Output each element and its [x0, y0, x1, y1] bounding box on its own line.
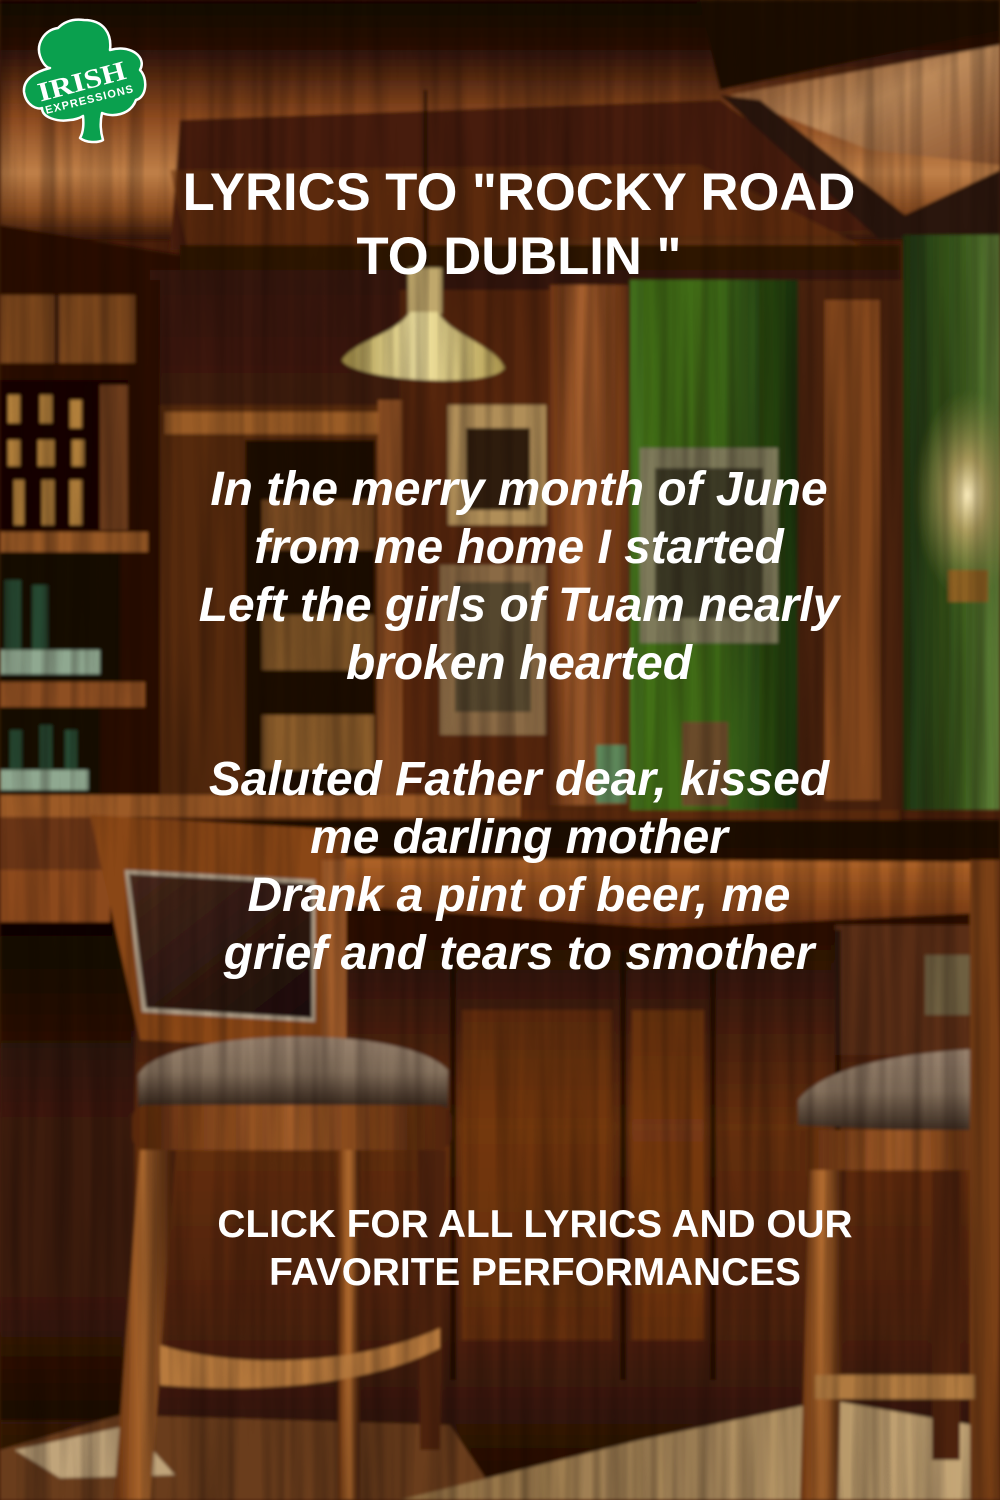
- lyrics verse: broken hearted: [346, 637, 692, 690]
- lyrics verse: Saluted Father dear, kissed: [209, 753, 829, 806]
- logo text: EXPRESSIONS: [44, 83, 134, 117]
- ceiling: [0, 0, 1000, 240]
- title: [183, 163, 855, 286]
- logo: shamrock badge: [22, 18, 146, 144]
- call to action: CLICK FOR ALL LYRICS AND OUR: [217, 1203, 853, 1246]
- logo text: IRISH: [34, 55, 129, 107]
- right stool: [798, 860, 1000, 1500]
- title: TO DUBLIN ": [357, 227, 681, 286]
- right sconce: [913, 390, 1000, 600]
- lyrics verse: grief and tears to smother: [224, 927, 814, 980]
- green wall panels: [630, 280, 798, 810]
- floor: [0, 1415, 500, 1500]
- framed pictures: [448, 405, 546, 525]
- hanging lamp: [424, 90, 427, 270]
- lyrics verse: from me home I started: [254, 521, 784, 574]
- lyrics verse: Left the girls of Tuam nearly: [199, 579, 839, 632]
- back wall: [150, 270, 900, 830]
- left stool: [90, 815, 452, 1500]
- title: LYRICS TO "ROCKY ROAD: [183, 163, 855, 222]
- bar counter: [0, 795, 520, 817]
- lower wall panel: [0, 820, 1000, 1500]
- lyrics verse: Drank a pint of beer, me: [248, 869, 790, 922]
- lyrics verse: In the merry month of June: [210, 463, 828, 516]
- logo text: [34, 55, 134, 117]
- central cabinet: [160, 405, 400, 800]
- lyrics verse: me darling mother: [310, 811, 728, 864]
- call to action: FAVORITE PERFORMANCES: [269, 1251, 801, 1294]
- lyrics verse: [199, 463, 842, 980]
- left shelves: [0, 280, 160, 820]
- call to action: [217, 1203, 853, 1294]
- bottles on bar: [596, 745, 626, 803]
